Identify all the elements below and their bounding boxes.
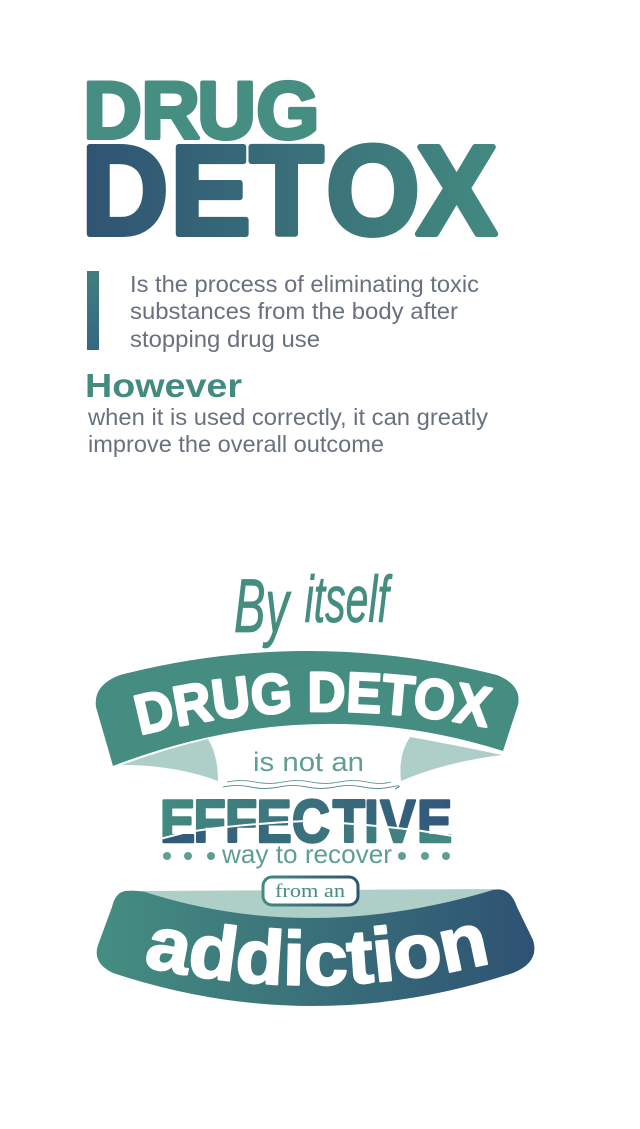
pill label: from an bbox=[263, 877, 358, 905]
ribbon band bbox=[96, 651, 519, 766]
heading: EFFECTIVE: EFFECTIVE bbox=[160, 788, 452, 855]
accent bar bbox=[87, 271, 99, 350]
pill label: from an: from an bbox=[275, 881, 346, 902]
title: Drug Detox bbox=[82, 66, 497, 262]
decorative waves bbox=[223, 780, 399, 789]
however text: improve the overall outcome bbox=[88, 431, 384, 457]
definition text: stopping drug use bbox=[130, 326, 320, 352]
however text: when it is used correctly, it can greatly bbox=[87, 404, 489, 430]
ribbon text: DRUG DETOX bbox=[133, 671, 494, 736]
ribbon fold right bbox=[400, 737, 502, 781]
heading: However: However bbox=[85, 367, 242, 404]
script heading: By itself: By bbox=[234, 565, 292, 649]
text: way to recover: way to recover bbox=[221, 839, 392, 869]
text with dots: way to recover bbox=[163, 839, 450, 869]
dots right bbox=[398, 852, 450, 860]
script heading: By itself: itself bbox=[305, 562, 392, 636]
definition text: substances from the body after bbox=[130, 298, 458, 324]
ribbon band bbox=[97, 889, 534, 1006]
however text bbox=[87, 404, 489, 457]
dots left bbox=[163, 852, 215, 860]
ribbon text: addiction bbox=[146, 924, 488, 986]
definition text: Is the process of eliminating toxic bbox=[130, 271, 479, 297]
title line: DETOX: DETOX bbox=[82, 121, 497, 262]
ribbon fold left bbox=[122, 739, 218, 781]
ribbon backing bbox=[135, 889, 495, 925]
bottom ribbon: addiction bbox=[96, 889, 534, 1006]
definition text bbox=[130, 271, 479, 352]
text: is not an: is not an bbox=[253, 747, 364, 777]
title line: DRUG: DRUG bbox=[83, 66, 319, 156]
top ribbon: drug detox bbox=[96, 651, 519, 781]
